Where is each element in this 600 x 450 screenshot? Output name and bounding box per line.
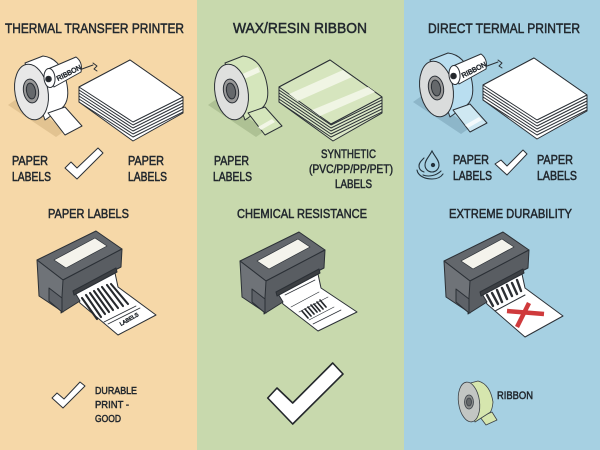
panel: thermal transfer printer (0, 0, 197, 450)
icon: water drop (417, 151, 443, 179)
panel: direct thermal printer (404, 0, 600, 450)
icon: printer with crossed out label (444, 232, 563, 337)
text: labels left: LABELS (12, 170, 51, 184)
text: synthetic labels: LABELS (335, 177, 372, 191)
subheading: paper labels: PAPER LABELS (48, 206, 129, 221)
text: durable: DURABLE (95, 385, 137, 397)
heading: direct thermal printer: DIRECT TERMAL PRINTER (428, 20, 580, 36)
icon: synthetic label stack (279, 60, 382, 141)
text: print: PRINT - (95, 399, 129, 411)
icon: paper label stack 3 (483, 58, 587, 139)
panel: wax/resin ribbon (197, 0, 404, 450)
subheading: extreme durability: EXTREME DURABILITY (449, 206, 572, 221)
icon: large check (268, 363, 343, 424)
text: paper, direct column: PAPER (453, 153, 489, 167)
text: paper, wax column: PAPER (214, 154, 249, 168)
icon: durable print check (52, 382, 85, 408)
text: labels right: LABELS (128, 170, 167, 184)
subheading: chemical resistance: CHEMICAL RESISTANCE (237, 206, 367, 221)
text: labels, direct column: LABELS (453, 169, 492, 183)
text: paper right: PAPER (128, 154, 164, 168)
icon: paper roll with ribbon (8, 56, 97, 137)
text: synthetic: SYNTHETIC (321, 147, 376, 161)
text: labels, direct right: LABELS (537, 169, 577, 183)
icon: printer with barcode label (37, 231, 156, 335)
icon: small ribbon roll (456, 381, 497, 425)
icon: paper label stack 1 (79, 60, 183, 141)
icon: check mark 3 (495, 150, 527, 175)
icon: printer with shipping label (240, 232, 357, 331)
text: paper, direct right: PAPER (537, 153, 573, 167)
label: ribbon on roll 1: RIBBON (56, 64, 83, 83)
heading: thermal transfer printer: THERMAL TRANSFER PRINTER (5, 20, 184, 36)
heading: wax/resin ribbon: WAX/RESIN RIBBON (233, 20, 367, 37)
text: synthetic materials: (PVC/PP/PP/PET) (309, 162, 393, 176)
icon: direct thermal roll with ribbon (413, 53, 502, 134)
text: ribbon legend: RIBBON (497, 390, 533, 402)
text: labels, wax column: LABELS (213, 170, 252, 184)
label: ribbon on roll 3: RIBBON (461, 61, 488, 80)
label: printed labels text: LABELS (119, 312, 140, 328)
text: paper labels left: PAPER (12, 154, 48, 168)
icon: wax/resin roll (208, 56, 282, 137)
icon: check mark 1 (65, 148, 103, 179)
text: good: GOOD (95, 413, 121, 425)
